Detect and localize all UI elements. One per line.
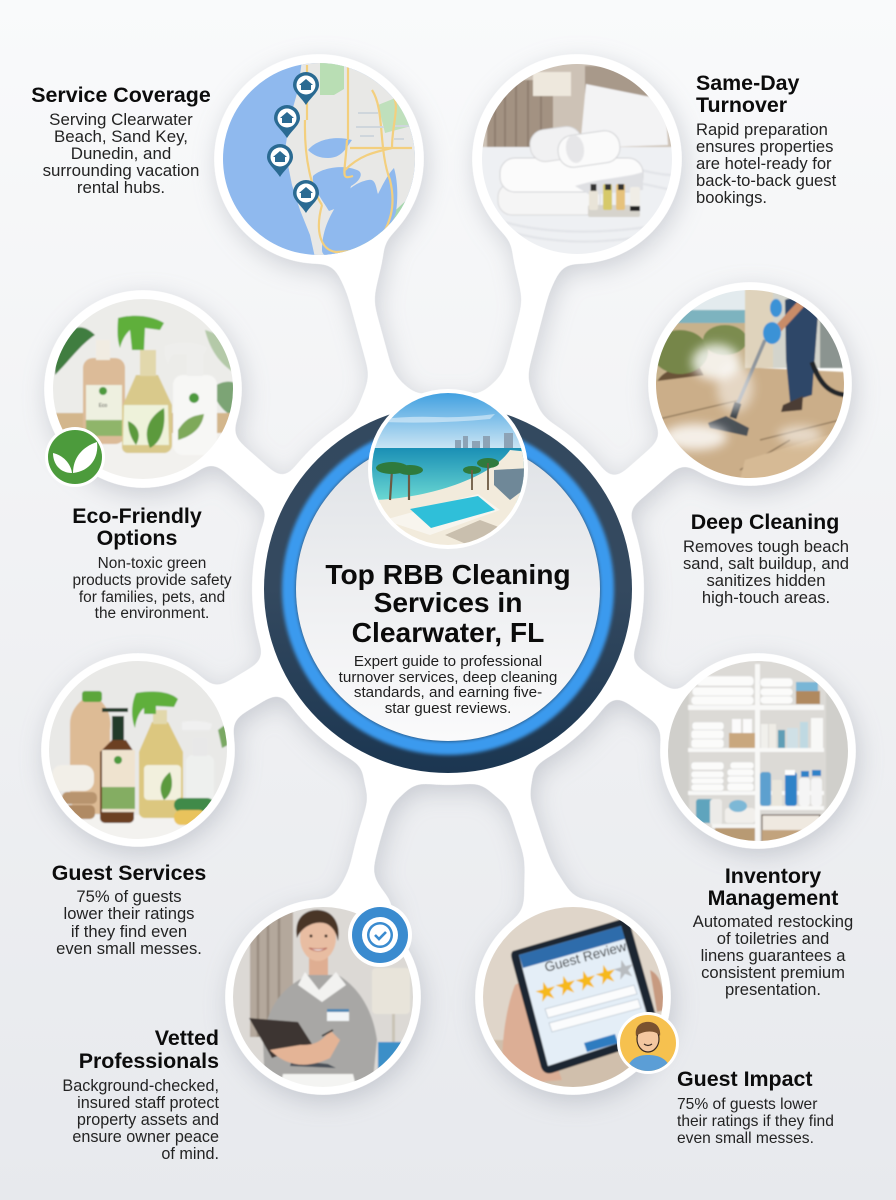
- towels photo: [480, 60, 675, 260]
- body: inventory management: of toiletries and: [717, 929, 829, 948]
- panel: guest services: [45, 655, 235, 958]
- title: Clearwater, FL: [352, 616, 544, 648]
- body: vetted professionals: ensure owner peace: [72, 1128, 219, 1146]
- guest review tablet photo: ★: [591, 957, 621, 992]
- heading: same-day turnover: Turnover: [696, 93, 787, 117]
- body: deep cleaning: sanitizes hidden: [706, 571, 826, 590]
- steam cleaning photo: [656, 290, 844, 478]
- guest review tablet photo: ★: [609, 952, 639, 987]
- subtitle: star guest reviews.: [385, 700, 511, 717]
- body: inventory management: presentation.: [725, 980, 821, 999]
- icon: guest avatar: [617, 1012, 679, 1074]
- body: eco-friendly options: products provide safety: [72, 572, 232, 589]
- panel: central hub: [264, 389, 632, 773]
- body: vetted professionals: insured staff protect: [77, 1094, 219, 1112]
- eco products photo: [50, 298, 240, 485]
- body: same-day turnover: bookings.: [696, 188, 767, 207]
- heading: eco-friendly options: Eco-Friendly: [72, 504, 202, 528]
- cleaning products photo: [49, 661, 227, 839]
- body: same-day turnover: back-to-back guest: [696, 171, 837, 190]
- map pins: [267, 72, 319, 213]
- body: guest impact: their ratings if they find: [677, 1113, 834, 1130]
- heading: guest services: Guest Services: [52, 861, 206, 885]
- body: eco-friendly options: the environment.: [95, 605, 209, 622]
- body: inventory management: Automated restocking: [693, 912, 853, 931]
- body: eco-friendly options: Non-toxic green: [98, 555, 206, 572]
- panel: same-day turnover: [480, 60, 837, 260]
- dark outer ring: [264, 405, 632, 773]
- body: service coverage: Serving Clearwater: [49, 110, 193, 129]
- body: same-day turnover: Rapid preparation: [696, 120, 828, 139]
- guest review tablet photo: ★: [531, 974, 561, 1009]
- panel: inventory management: [665, 658, 855, 999]
- heading: inventory management: Inventory: [725, 864, 821, 888]
- body: eco-friendly options: for families, pets, and: [79, 589, 225, 606]
- body: vetted professionals: Background-checked,: [62, 1077, 219, 1095]
- heading: eco-friendly options: Options: [97, 526, 177, 550]
- body: deep cleaning: Removes tough beach: [683, 537, 849, 556]
- panel: guest impact: [480, 905, 834, 1147]
- heading: deep cleaning: Deep Cleaning: [691, 510, 839, 534]
- panel: deep cleaning: [650, 285, 853, 607]
- icon: certified badge: [348, 903, 412, 967]
- body: service coverage: Beach, Sand Key,: [54, 127, 188, 146]
- body: vetted professionals: property assets and: [77, 1111, 219, 1129]
- subtitle: Expert guide to professional: [354, 653, 542, 670]
- guest review tablet photo: ★: [571, 963, 601, 998]
- linen closet photo: [668, 661, 848, 841]
- panel: eco-friendly options: [45, 298, 240, 622]
- body: vetted professionals: of mind.: [161, 1145, 219, 1163]
- body: service coverage: Dunedin, and: [71, 144, 171, 163]
- body: guest services: if they find even: [71, 922, 187, 941]
- body: inventory management: linens guarantees a: [701, 946, 846, 965]
- body: guest services: even small messes.: [56, 939, 202, 958]
- panel: service coverage: [31, 60, 420, 262]
- connector network: [42, 55, 855, 1094]
- housekeeper photo: [233, 907, 413, 1087]
- body: inventory management: consistent premium: [701, 963, 845, 982]
- beach photo: [368, 389, 530, 560]
- body: guest impact: even small messes.: [677, 1130, 814, 1147]
- heading: vetted professionals: Professionals: [79, 1049, 219, 1073]
- body: guest services: 75% of guests: [76, 887, 182, 906]
- heading: inventory management: Management: [708, 886, 838, 910]
- center disc: [296, 437, 600, 741]
- subtitle: turnover services, deep cleaning: [339, 669, 557, 686]
- heading: vetted professionals: Vetted: [155, 1026, 219, 1050]
- heading: service coverage: Service Coverage: [31, 83, 211, 107]
- title: Services in: [374, 586, 522, 618]
- icon: leaf badge: [45, 427, 105, 487]
- body: deep cleaning: high-touch areas.: [702, 588, 830, 607]
- title: Top RBB Cleaning: [325, 558, 571, 590]
- body: deep cleaning: sand, salt buildup, and: [683, 554, 849, 573]
- guest review tablet photo: ★: [551, 968, 581, 1003]
- body: guest services: lower their ratings: [64, 904, 194, 923]
- body: same-day turnover: are hotel-ready for: [696, 154, 832, 173]
- body: service coverage: surrounding vacation: [43, 161, 199, 180]
- heading: same-day turnover: Same-Day: [696, 71, 800, 95]
- subtitle: standards, and earning five-: [354, 684, 542, 701]
- eco products photo: Eco: [99, 403, 108, 409]
- guest review tablet photo: [483, 907, 663, 1087]
- review text: Guest Review: [543, 939, 628, 975]
- panel: vetted professionals: [62, 903, 420, 1163]
- body: service coverage: rental hubs.: [77, 178, 165, 197]
- glowing blue ring: [289, 430, 607, 748]
- body: same-day turnover: ensures properties: [696, 137, 833, 156]
- map photo: [220, 60, 420, 262]
- body: guest impact: 75% of guests lower: [677, 1096, 817, 1113]
- heading: guest impact: Guest Impact: [677, 1067, 813, 1091]
